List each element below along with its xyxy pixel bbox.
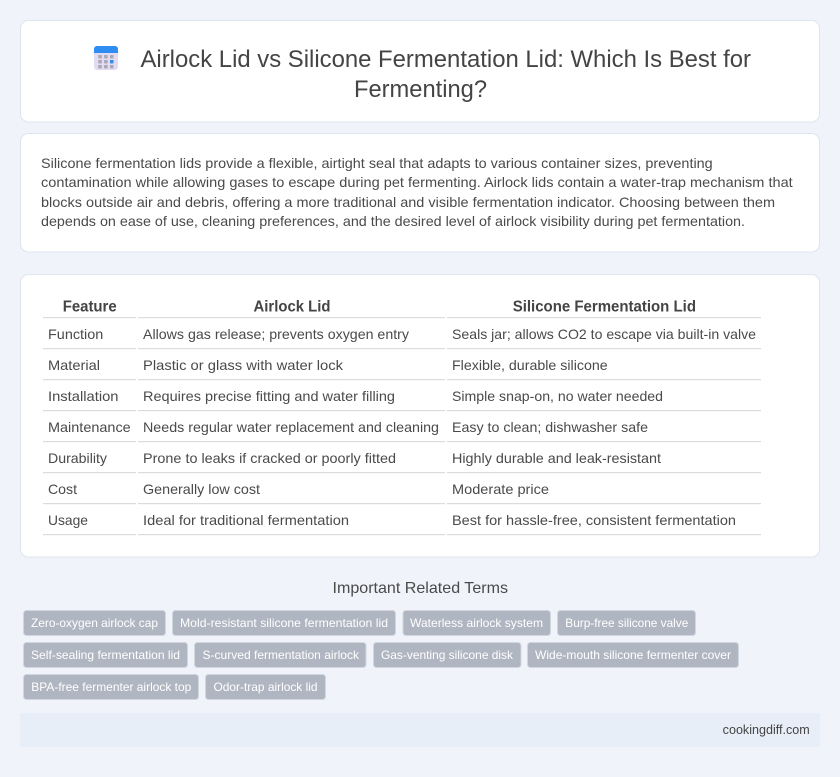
row: maintenance: Easy to clean; dishwasher safe [452, 419, 648, 435]
row: installation: Requires precise fitting and water filling [143, 388, 395, 404]
row: usage [48, 512, 736, 528]
tag: Self-sealing fermentation lid [31, 648, 180, 662]
tag: Odor-trap airlock lid [214, 680, 318, 694]
title: Fermenting? [354, 76, 487, 103]
tag [528, 642, 738, 668]
footer source text: cookingdiff.com [723, 723, 810, 737]
tag [403, 610, 550, 636]
panel: comparison table [20, 274, 820, 557]
row: material [48, 357, 608, 373]
tag: Waterless airlock system [410, 616, 543, 630]
tag [24, 642, 188, 668]
row: cost: Generally low cost [143, 481, 260, 497]
row: function: Function [48, 326, 103, 342]
tag: Wide-mouth silicone fermenter cover [535, 648, 731, 662]
row: material: Material [48, 357, 100, 373]
tag [374, 642, 521, 668]
row: material: Flexible, durable silicone [452, 357, 608, 373]
title [140, 46, 751, 103]
tag: Burp-free silicone valve [565, 616, 689, 630]
row: installation: Simple snap-on, no water needed [452, 388, 663, 404]
tag: Gas-venting silicone disk [381, 648, 514, 662]
footer bar [20, 713, 820, 747]
intro text: Silicone fermentation lids provide a flexible, airtight seal that adapts to various container sizes, preventing [41, 155, 713, 171]
row: material: Plastic or glass with water lock [143, 357, 344, 373]
row: usage: Best for hassle-free, consistent fermentation [452, 512, 736, 528]
tag [24, 674, 198, 700]
tag [172, 610, 396, 636]
row: durability [48, 450, 661, 466]
row: usage: Ideal for traditional fermentation [143, 512, 349, 528]
row: maintenance [48, 419, 648, 435]
intro text: depends on ease of use, cleaning preferences, and the desired level of airlock visibility during pet fermentation. [41, 213, 745, 229]
tag [558, 610, 696, 636]
tag [194, 642, 366, 668]
row: usage: Usage [48, 512, 88, 528]
related term tags [24, 610, 738, 700]
tag [206, 674, 326, 700]
panel: header [20, 20, 820, 122]
panel: introduction [20, 134, 820, 252]
table header: Feature [63, 298, 117, 316]
tag: Zero-oxygen airlock cap [31, 616, 158, 630]
row: durability: Durability [48, 450, 107, 466]
row: durability: Prone to leaks if cracked or poorly fitted [143, 450, 396, 466]
row: function: Allows gas release; prevents oxygen entry [143, 326, 409, 342]
icon: calendar grid [94, 46, 118, 70]
intro text [41, 155, 793, 229]
row: installation: Installation [48, 388, 118, 404]
row: maintenance: Needs regular water replacement and cleaning [143, 419, 439, 435]
tag: BPA-free fermenter airlock top [31, 680, 192, 694]
row: cost [48, 481, 549, 497]
row: maintenance: Maintenance [48, 419, 131, 435]
intro text: contamination while allowing gases to escape during pet fermenting. Airlock lids contain a water-trap mechanism that [41, 174, 793, 190]
row: durability: Highly durable and leak-resistant [452, 450, 661, 466]
row: cost: Moderate price [452, 481, 549, 497]
table header: Silicone Fermentation Lid [513, 298, 696, 316]
tag [24, 610, 166, 636]
row: cost: Cost [48, 481, 77, 497]
table header: Airlock Lid [254, 298, 330, 316]
title: Airlock Lid vs Silicone Fermentation Lid: Which Is Best for [140, 46, 751, 73]
tag: Mold-resistant silicone fermentation lid [180, 616, 388, 630]
tag: S-curved fermentation airlock [202, 648, 360, 662]
row: installation [48, 388, 663, 404]
table header [63, 298, 696, 316]
intro text: blocks outside air and debris, offering a more traditional and visible fermentation indicator. Choosing between them [41, 194, 775, 210]
row: function [48, 326, 756, 342]
row: function: Seals jar; allows CO2 to escape via built-in valve [452, 326, 756, 342]
table rules [43, 317, 761, 535]
heading: important related terms: Important Related Terms [332, 580, 508, 597]
